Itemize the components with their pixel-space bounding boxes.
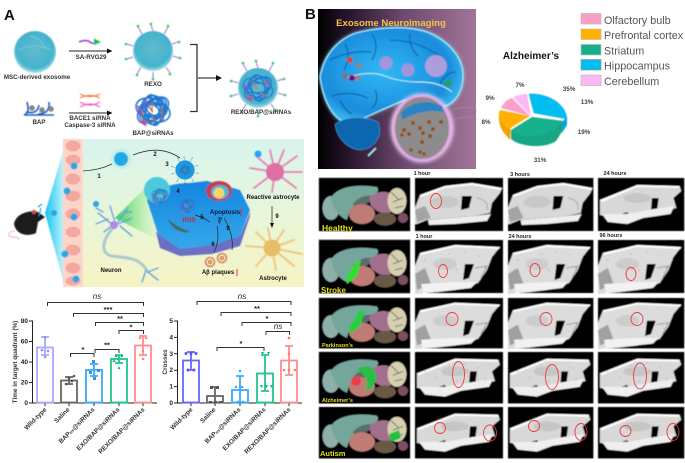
x category labels: BAPws@siRNAs xyxy=(58,406,97,445)
x category labels: EXO/BAP@siRNAs xyxy=(76,406,122,452)
panel: synthesis scheme xyxy=(4,23,292,137)
time labels row 2: 24 hours xyxy=(509,234,531,240)
step numbers: 4 xyxy=(176,189,180,195)
label: REXO/BAP@siRNAs: REXO/BAP@siRNAs xyxy=(231,109,292,116)
significance brackets: ns xyxy=(93,292,101,301)
significance brackets: * xyxy=(266,314,269,323)
chart: crosses xyxy=(162,292,302,455)
icon: REXO at cell xyxy=(171,156,199,184)
label: Stroke: Stroke xyxy=(321,286,346,295)
step numbers: 7 xyxy=(217,218,221,224)
panel: mechanism xyxy=(9,139,304,287)
scans xyxy=(415,407,684,458)
icon: reactive astrocyte xyxy=(250,150,302,192)
data points xyxy=(184,337,296,403)
step numbers: 9 xyxy=(275,214,279,220)
significance brackets: ** xyxy=(254,304,260,313)
time labels row 2 xyxy=(416,233,622,240)
icon: SA-RVG29 peptide xyxy=(79,38,101,45)
x category labels xyxy=(23,406,147,455)
pie labels: 31% xyxy=(534,157,547,164)
panel label B: B xyxy=(305,6,316,23)
label: Astrocyte: Astrocyte xyxy=(259,276,287,282)
panel: exosome neuroimaging brain xyxy=(318,9,476,169)
legend: Striatum xyxy=(604,46,644,58)
pie labels: 9% xyxy=(485,95,495,102)
pie labels: 13% xyxy=(581,99,594,106)
significance brackets: * xyxy=(240,339,243,348)
bars xyxy=(37,336,151,402)
time labels row 1: 1 hour xyxy=(414,171,431,177)
bars xyxy=(183,346,297,402)
y tick labels: 1 xyxy=(169,384,173,391)
y tick labels xyxy=(169,318,173,407)
significance brackets xyxy=(197,292,291,351)
label: Alzheimer's: Alzheimer’s xyxy=(322,398,353,404)
heading: Alzheimer's: Alzheimer’s xyxy=(503,51,560,62)
y tick labels: 5 xyxy=(169,318,173,325)
time labels row 1: 3 hours xyxy=(510,172,530,178)
label: Caspase-3 siRNA: Caspase-3 siRNA xyxy=(64,122,116,129)
row: Parkinson's xyxy=(318,298,684,349)
label: Aβ plaques: Aβ plaques xyxy=(202,270,235,276)
label: BAP@siRNAs: BAP@siRNAs xyxy=(132,130,174,137)
significance brackets: * xyxy=(82,345,85,354)
time labels row 2: 1 hour xyxy=(416,234,433,240)
y axis label: Time in target quadrant (%) xyxy=(12,321,19,403)
row: Autism xyxy=(318,407,684,458)
arrow: to REXO xyxy=(69,48,112,54)
legend: Prefrontal cortex xyxy=(604,30,684,42)
scans xyxy=(415,298,684,349)
decrease arrow xyxy=(236,269,238,276)
axes xyxy=(174,320,302,406)
x category labels: EXO/BAP@siRNAs xyxy=(222,406,268,452)
scans xyxy=(415,178,684,231)
time labels row 1: 24 hours xyxy=(604,171,626,177)
time labels row 2: 96 hours xyxy=(600,233,622,239)
time labels row 1 xyxy=(414,171,626,178)
x category labels xyxy=(169,406,293,455)
panel label A: A xyxy=(4,7,15,24)
significance brackets: * xyxy=(130,322,133,332)
icons: Aβ plaques xyxy=(206,254,226,266)
step numbers: 6 xyxy=(211,242,215,248)
background xyxy=(318,9,476,169)
icon: REXO/BAP@siRNAs xyxy=(230,60,286,117)
x category labels: REXO/BAP@siRNAs xyxy=(243,406,293,455)
bracket and arrow xyxy=(190,44,222,112)
arrow: to BAP@siRNAs xyxy=(69,110,112,116)
significance brackets: *** xyxy=(104,305,112,314)
label: SA-RVG29: SA-RVG29 xyxy=(76,54,107,61)
significance brackets: ns xyxy=(274,322,282,331)
x category labels: BAPws@siRNAs xyxy=(204,406,243,445)
label: BACE1 siRNA: BACE1 siRNA xyxy=(69,115,111,122)
arrow 9 xyxy=(270,206,274,228)
scans xyxy=(415,240,684,294)
label: Parkinson's: Parkinson’s xyxy=(322,343,353,349)
icon: BAP@siRNAs nanoparticle xyxy=(131,88,175,132)
y tick labels xyxy=(21,318,28,407)
x category labels: Saline xyxy=(53,406,72,425)
pie labels: 35% xyxy=(563,86,576,93)
label: REXO: REXO xyxy=(144,81,162,88)
x category labels: Wild-type xyxy=(169,406,195,432)
arrow 2 xyxy=(133,150,180,158)
scans xyxy=(415,352,684,403)
pie labels: 8% xyxy=(481,119,491,126)
icon: target cell xyxy=(144,177,250,256)
labels: ROS and arrows: Apoptosis xyxy=(210,209,241,216)
label: Healthy: Healthy xyxy=(322,223,353,233)
chart: pie xyxy=(481,82,594,164)
y tick labels: 4 xyxy=(169,334,173,341)
y tick labels: 0 xyxy=(24,400,28,407)
row: Alzheimer's xyxy=(318,352,684,404)
significance brackets: ** xyxy=(117,314,123,323)
pie labels: 19% xyxy=(578,129,591,136)
axes xyxy=(29,320,157,406)
icon: siRNA strands xyxy=(80,94,100,107)
step numbers: 1 xyxy=(97,174,101,180)
icon: neuron xyxy=(93,186,158,282)
step numbers: 2 xyxy=(153,152,157,158)
label: MSC-derived exosome: MSC-derived exosome xyxy=(4,74,71,81)
labels: ROS and arrows xyxy=(182,209,241,252)
legend: Olfactory bulb xyxy=(604,15,671,27)
data points xyxy=(41,336,148,385)
label: Reactive astrocyte: Reactive astrocyte xyxy=(246,195,300,201)
icon: astrocyte xyxy=(246,228,302,270)
icon: REXO xyxy=(125,23,181,80)
brain illustration xyxy=(320,28,476,162)
cyan delivery cone xyxy=(45,148,64,284)
x category labels: Saline xyxy=(199,406,218,425)
row: Stroke xyxy=(318,239,684,295)
y tick labels: 2 xyxy=(169,367,173,374)
step numbers: 3 xyxy=(165,162,169,168)
epithelium xyxy=(51,139,83,287)
labels: ROS and arrows: ROS xyxy=(182,218,196,224)
step numbers: 5 xyxy=(200,215,204,221)
y tick labels: 0 xyxy=(169,400,173,407)
background xyxy=(83,139,304,287)
legend: Hippocampus xyxy=(604,60,671,72)
x category labels: Wild-type xyxy=(23,406,49,432)
significance brackets: ns xyxy=(238,292,246,301)
chart: time in target quadrant xyxy=(12,292,157,455)
title: Exosome Neuroimaging xyxy=(336,18,446,29)
arrow 1 xyxy=(83,164,112,171)
y tick labels: 20 xyxy=(21,380,28,386)
y tick labels: 80 xyxy=(21,318,28,325)
label: Neuron: Neuron xyxy=(100,268,122,274)
label: BAP: BAP xyxy=(32,119,46,126)
step numbers xyxy=(97,152,279,248)
y tick labels: 60 xyxy=(21,338,28,346)
icon: MSC-derived exosome xyxy=(14,31,56,73)
y axis label: Crosses xyxy=(162,349,169,375)
row: Healthy xyxy=(318,178,684,233)
significance brackets: ** xyxy=(104,340,110,350)
x category labels: REXO/BAP@siRNAs xyxy=(97,406,147,455)
icon: free REXO xyxy=(112,150,130,168)
significance brackets xyxy=(48,292,144,357)
icon: mouse xyxy=(9,204,45,239)
pie labels xyxy=(481,82,594,164)
label: Autism: Autism xyxy=(320,449,346,458)
pie labels: 7% xyxy=(515,82,525,89)
icon: BAP xyxy=(24,102,54,115)
legend: Cerebellum xyxy=(604,76,659,88)
y tick labels: 40 xyxy=(21,359,28,366)
step numbers: 8 xyxy=(226,226,230,232)
y tick labels: 3 xyxy=(169,351,173,358)
legend xyxy=(581,14,684,88)
